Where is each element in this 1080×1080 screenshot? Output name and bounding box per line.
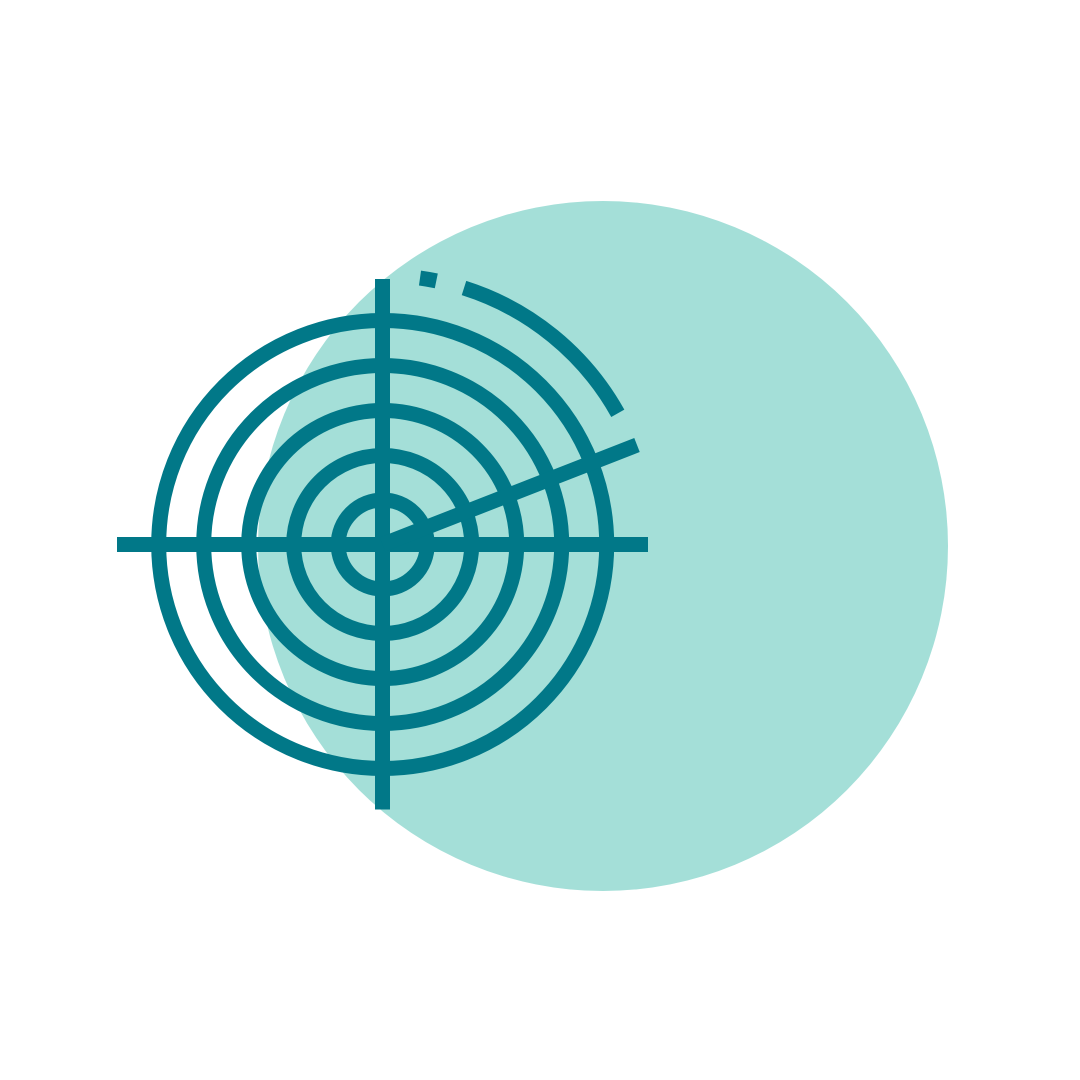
icon: target with crosshair <box>117 278 648 810</box>
outer arc dash <box>420 278 436 281</box>
concentric target rings <box>159 320 607 768</box>
crosshair lines <box>117 279 648 810</box>
outer arc segment <box>464 288 618 413</box>
diagonal radar sweep line <box>382 445 637 544</box>
background circle <box>258 201 948 891</box>
